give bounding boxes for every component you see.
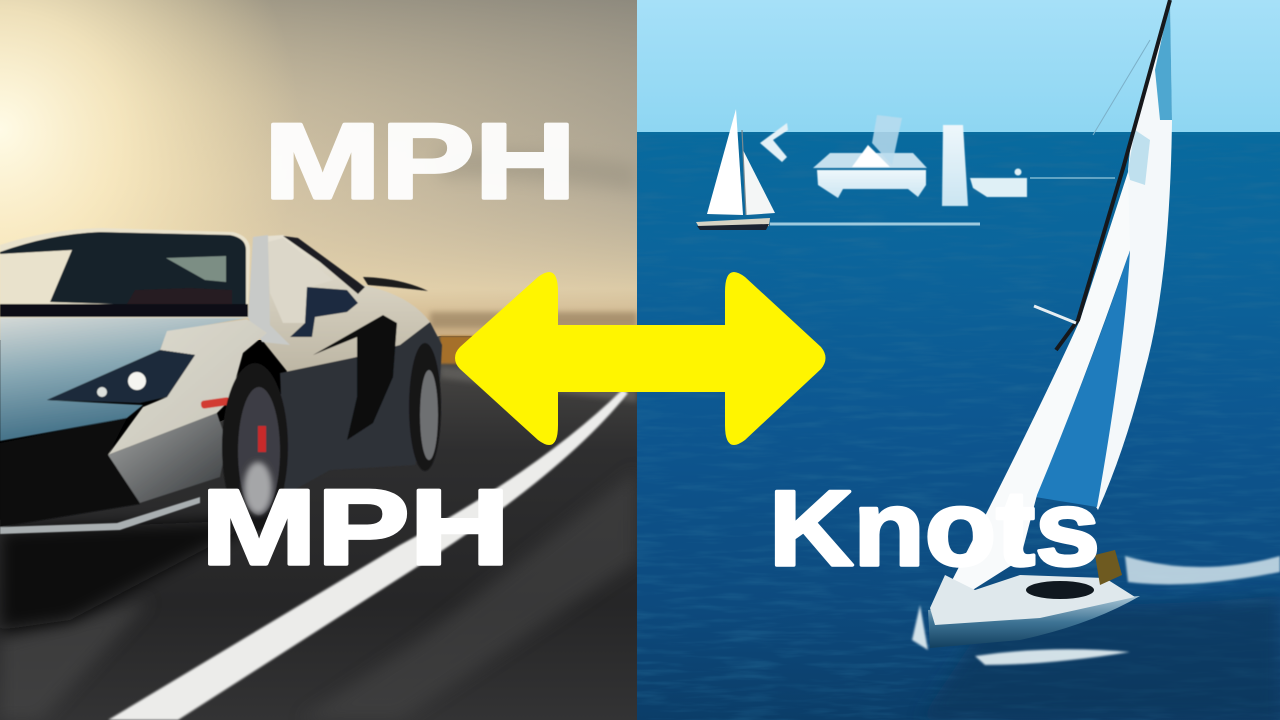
- rigging line: [1093, 40, 1150, 135]
- front wheel: [222, 363, 288, 531]
- heading: MPH lower: MPH: [201, 467, 510, 587]
- heading: Knots: Knots: [769, 468, 1100, 588]
- front grille: [0, 418, 140, 527]
- spreader: [1034, 306, 1076, 323]
- heading: MPH upper: MPH: [264, 101, 576, 221]
- mainsail: [1095, 0, 1172, 510]
- hull: [928, 596, 1140, 648]
- mirror: [290, 287, 358, 337]
- windshield: [0, 228, 250, 318]
- panel: car on road (left): [0, 0, 637, 720]
- sports car: [0, 228, 442, 534]
- large sailboat: [928, 0, 1172, 648]
- distant sailboat: [696, 109, 775, 230]
- side marker: [201, 397, 230, 409]
- sky: [637, 0, 1280, 133]
- upper body: [253, 235, 430, 375]
- hood: [0, 318, 247, 441]
- sky background: [0, 0, 637, 340]
- spoiler: [363, 277, 428, 291]
- garbled ghost glyphs: [760, 115, 1027, 206]
- jib white band: [945, 172, 1130, 598]
- road surface: [0, 336, 637, 720]
- ocean: [637, 132, 1280, 720]
- arrow: yellow double-headed conversion arrow: [455, 272, 826, 445]
- front fender: [108, 319, 267, 455]
- crew and gear: [1095, 550, 1122, 585]
- mast: [1056, 0, 1170, 350]
- side air intake: [313, 315, 397, 440]
- deck: [930, 575, 1135, 625]
- jib shaded panel: [1035, 250, 1130, 507]
- front lower panel: [108, 413, 227, 503]
- panel: sailboat on ocean (right): [637, 0, 1280, 720]
- rear wheel: [409, 343, 441, 471]
- lower side panel: [280, 322, 442, 495]
- headlight: [47, 350, 195, 403]
- cockpit: [1026, 581, 1094, 599]
- front trim: [0, 497, 200, 534]
- side window and A-pillar: [248, 235, 365, 345]
